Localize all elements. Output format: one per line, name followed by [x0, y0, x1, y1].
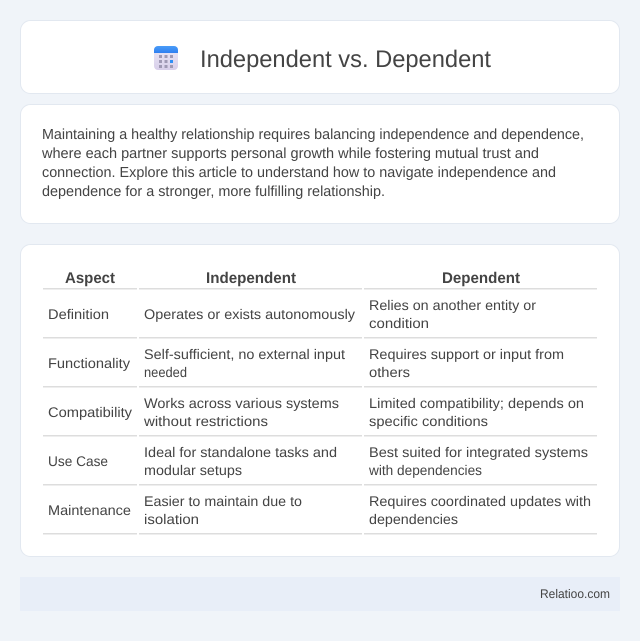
- row: use case: with dependencies: [368, 462, 482, 478]
- row: functionality: Self-sufficient, no external input: [144, 346, 345, 362]
- table header: Independent: [206, 270, 296, 287]
- intro paragraph: connection. Explore this article to understand how to navigate independence and: [42, 165, 556, 181]
- panel: title card: [20, 20, 620, 94]
- row: maintenance: Maintenance: [48, 502, 131, 518]
- row: definition: Definition: [48, 306, 109, 322]
- intro paragraph: where each partner supports personal growth while fostering mutual trust and: [41, 146, 539, 162]
- row: functionality: needed: [144, 364, 187, 380]
- row: use case: [48, 444, 588, 478]
- row: maintenance: dependencies: [369, 511, 458, 527]
- row: use case: Use Case: [48, 453, 108, 469]
- row: functionality: Requires support or input from: [369, 346, 564, 362]
- row: maintenance: Easier to maintain due to: [144, 493, 302, 509]
- row: use case: modular setups: [144, 462, 242, 478]
- table rules: [43, 288, 597, 534]
- row: maintenance: [48, 493, 591, 527]
- row: definition: condition: [369, 315, 429, 331]
- row: compatibility: without restrictions: [143, 413, 268, 429]
- panel: introduction: [20, 104, 620, 224]
- panel: comparison table: [20, 244, 620, 556]
- row: use case: Best suited for integrated systems: [369, 444, 588, 460]
- row: compatibility: Compatibility: [48, 404, 132, 420]
- row: definition: Relies on another entity or: [369, 297, 536, 313]
- table header: Dependent: [442, 270, 520, 287]
- table header: [65, 270, 520, 287]
- row: use case: Ideal for standalone tasks and: [144, 444, 337, 460]
- row: definition: [48, 297, 536, 331]
- title: Independent vs. Dependent: [200, 46, 491, 73]
- intro paragraph: dependence for a stronger, more fulfilling relationship.: [42, 184, 385, 200]
- row: functionality: Functionality: [48, 355, 130, 371]
- footer: [20, 577, 620, 611]
- row: compatibility: Works across various systems: [144, 395, 339, 411]
- icon: calendar: [154, 46, 178, 70]
- row: maintenance: Requires coordinated updates with: [369, 493, 591, 509]
- row: compatibility: [48, 395, 584, 429]
- row: functionality: [48, 346, 564, 380]
- row: compatibility: Limited compatibility; depends on: [369, 395, 584, 411]
- row: compatibility: specific conditions: [369, 413, 488, 429]
- intro paragraph: [41, 127, 584, 200]
- intro paragraph: Maintaining a healthy relationship requires balancing independence and dependence,: [42, 127, 584, 143]
- row: definition: Operates or exists autonomously: [144, 306, 355, 322]
- footer: Relatioo.com: [540, 587, 610, 601]
- table header: Aspect: [65, 270, 115, 287]
- row: functionality: others: [369, 364, 410, 380]
- row: maintenance: isolation: [144, 511, 199, 527]
